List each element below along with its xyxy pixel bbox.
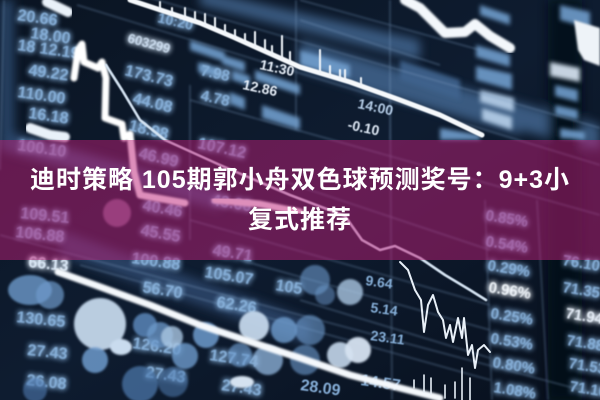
number column: right of centre: 5.14 [370,299,399,319]
blurred column blocks top right [190,5,590,140]
trace: top right curve [405,0,510,48]
number column: centre: 56.70 [141,279,184,302]
number column: centre: 107.12 [196,135,248,162]
number column: far left [15,7,81,393]
number column: far left: 26.08 [26,372,67,393]
number column: centre: 173.73 [123,62,175,91]
number column: far left: 49.22 [27,62,70,85]
trace: thin descending line [106,65,486,300]
trace: far right lower edge [594,270,600,340]
trace: ragged segment behind title [215,200,300,212]
number column: right of centre: 14:00 [356,95,395,118]
number column: centre [123,9,304,400]
number column: right of centre: -0.10 [346,116,381,139]
percent column: 0.54% [484,233,529,257]
percent column: 0.29% [486,257,531,281]
number column: centre: 27.43 [220,377,263,400]
number column: centre: 46.99 [137,145,180,171]
number column: far left: 66.13 [28,254,69,275]
title: 复式推荐 [248,206,352,234]
trace: top descending volume edge [130,0,482,135]
number column: centre: 7.98 [199,62,231,85]
trace: steep upper-left decline [74,44,185,203]
bokeh circles lower left [8,199,371,400]
trace: wide lower diagonal [58,272,440,398]
trace: jagged lower right line [400,262,490,368]
number column: far left: 18 12.19 [16,37,81,63]
number column: centre: 126.20 [131,335,182,359]
number column: right of centre [241,56,406,400]
number column: far left: 16.18 [27,105,70,128]
number column: centre: 27.43 [144,364,187,387]
number column: centre: 43.66 [210,192,253,215]
percent column [484,207,600,400]
number column: centre: 62.26 [215,294,258,317]
title: 迪时策略 105期郭小舟双色球预测奖号：9+3小 [30,166,570,194]
number column: centre: 603299 [126,30,172,56]
number column: centre: 44.08 [131,90,174,117]
number column: right of centre: 28.09 [299,377,342,400]
trace: vertical volume bars top [160,2,361,86]
number column: centre: 40.46 [141,197,184,221]
trace: vertical volume bars bottom [414,368,470,400]
number column: centre: 10:20 [156,9,195,33]
bright blob far right [574,20,600,66]
number column: right of centre: 14.57 [359,372,402,395]
percent column: 0.96% [487,279,532,303]
number column: far left: 110.00 [16,84,66,108]
number column: far left: 18.00 [29,25,72,48]
number column: centre: 127.74 [208,347,259,371]
trace: blobs top left [30,2,68,137]
number column: right of centre: 11:30 [258,56,296,79]
number column: centre: 100.88 [130,250,181,274]
number column: centre: 45.55 [139,222,182,246]
number column: far left: 20.66 [16,7,59,30]
number column: centre: 4.78 [199,87,231,110]
percent column: 0.25% [489,305,534,329]
number column: right of centre: 9.64 [365,272,394,292]
number column: far left: 130.65 [16,309,66,331]
percent column: 76.10 [561,252,600,275]
title [30,166,570,234]
number column: centre: 18.98 [127,117,170,144]
number column: centre: 105 [274,277,304,298]
number column: centre: 105.07 [203,264,254,289]
percent column: 0.85% [484,207,529,231]
percent column: 0.53% [489,330,534,354]
pink translucent title band [0,140,600,260]
percent column: 71.35 [561,279,600,302]
number column: far left: 27.43 [27,342,68,363]
number column: far left: 106.88 [15,224,65,246]
number column: centre: 49.71 [211,242,254,265]
number column: right of centre: 23.11 [370,327,406,348]
number column: far left: 100.10 [16,137,67,161]
percent column: 0.80% [491,354,536,378]
number column: far left: 109.51 [20,205,70,227]
number column: right of centre: 12.86 [241,76,279,99]
